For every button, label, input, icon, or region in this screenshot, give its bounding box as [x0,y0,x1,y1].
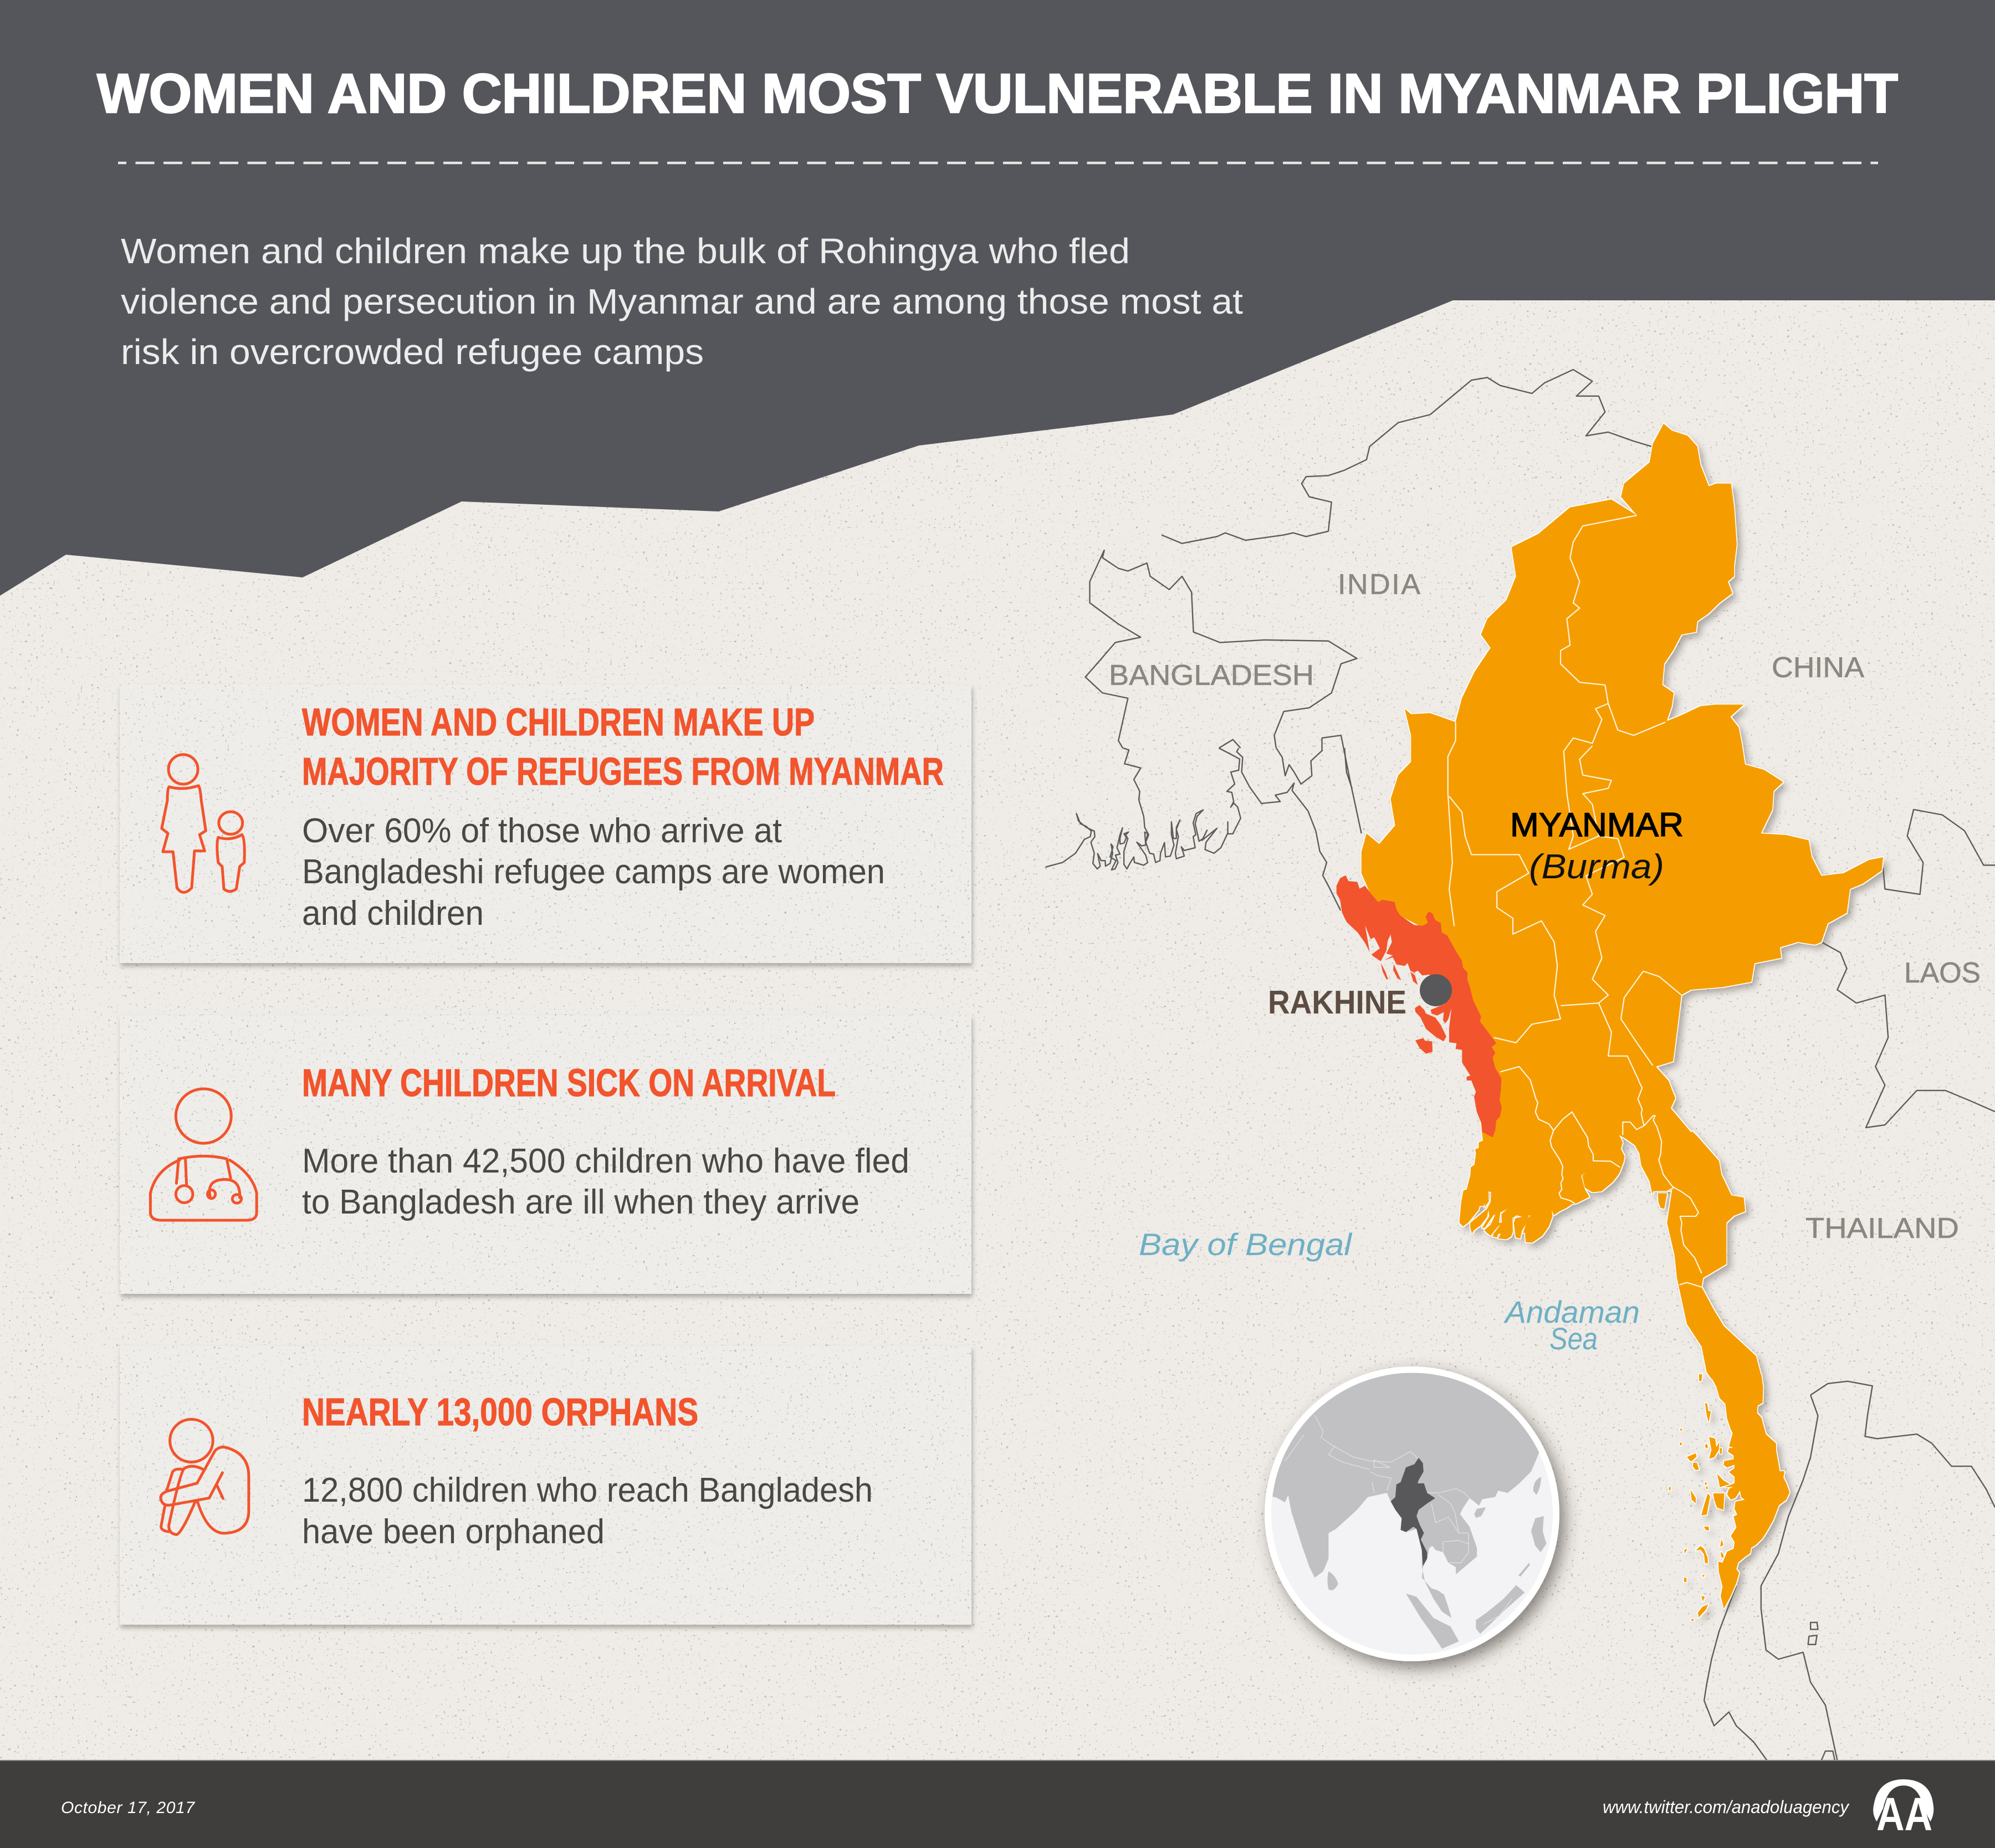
locator globe [1247,1347,1579,1661]
globe: Myanmar [1390,1458,1435,1566]
intro text: Women and children make up the bulk of Rohingya who fled [121,231,1130,271]
card: sick children background [120,1015,971,1294]
label: Thailand: THAILAND [1805,1212,1959,1245]
body: card 3 [302,1471,873,1551]
body: card 3: 12,800 children who reach Bangladesh [302,1471,873,1509]
label: Andaman Sea: Andaman [1503,1294,1640,1329]
body: card 1 [302,812,885,933]
map: Ayeyarwady delta and Mon coast [1459,1081,1708,1243]
map: state and region borders [1448,515,1702,1287]
label: China: CHINA [1772,652,1864,684]
heading: card 3: NEARLY 13,000 ORPHANS [302,1390,698,1434]
title: WOMEN AND CHILDREN MOST VULNERABLE IN MYANMAR PLIGHT [97,63,1898,125]
icon: doctor with stethoscope [150,1089,257,1220]
label: Rakhine: RAKHINE [1268,984,1406,1021]
body: card 1: Over 60% of those who arrive at [302,812,782,850]
body: card 2: More than 42,500 children who have fled [302,1142,909,1180]
footer band [0,1760,1995,1848]
logo: Anadolu Agency: AA [1876,1788,1932,1840]
body: card 1: and children [302,894,484,933]
map: Rakhine state [1337,876,1502,1137]
icon: woman and child [162,755,244,892]
map: Myanmar [1362,424,1883,1621]
marker: Rakhine dot [1420,974,1452,1006]
heading: card 2: MANY CHILDREN SICK ON ARRIVAL [302,1061,836,1104]
map: upper peninsula [1667,1131,1762,1379]
footer link: www.twitter.com/anadoluagency [1603,1797,1850,1817]
body: card 1: Bangladeshi refugee camps are women [302,853,885,891]
neighbouring country borders [1045,370,1995,1763]
map: northern Myanmar [1362,424,1883,1123]
icon: child hugging knees [161,1419,249,1534]
label: Laos: LAOS [1904,957,1981,989]
globe: national borders [1285,1415,1512,1624]
label: Burma: (Burma) [1529,848,1664,886]
intro text: violence and persecution in Myanmar and are among those most at [121,281,1243,321]
intro text [121,231,1243,372]
heading: card 1 [302,700,944,793]
map: lower peninsula and Myeik islands [1669,1374,1789,1621]
label: Myanmar: MYANMAR [1510,806,1684,843]
header band [0,0,1995,596]
label: Bay of Bengal: Bay of Bengal [1139,1227,1353,1262]
heading: card 1: MAJORITY OF REFUGEES FROM MYANMAR [302,750,944,793]
globe: land masses [1272,1373,1546,1649]
intro text: risk in overcrowded refugee camps [121,332,704,372]
body: card 2: to Bangladesh are ill when they arrive [302,1183,860,1221]
globe: white ring [1265,1366,1559,1661]
card: orphans background [120,1346,971,1625]
body: card 3: have been orphaned [302,1513,605,1551]
globe: ocean [1271,1373,1553,1655]
label: India: INDIA [1338,569,1420,601]
label: Bangladesh: BANGLADESH [1109,659,1314,692]
card: women and children background [120,684,971,963]
label: Andaman Sea [1503,1294,1640,1356]
label: Andaman Sea: Sea [1549,1321,1598,1356]
footer date: October 17, 2017 [61,1799,195,1817]
body: card 2 [302,1142,909,1221]
heading: card 1: WOMEN AND CHILDREN MAKE UP [302,700,815,744]
